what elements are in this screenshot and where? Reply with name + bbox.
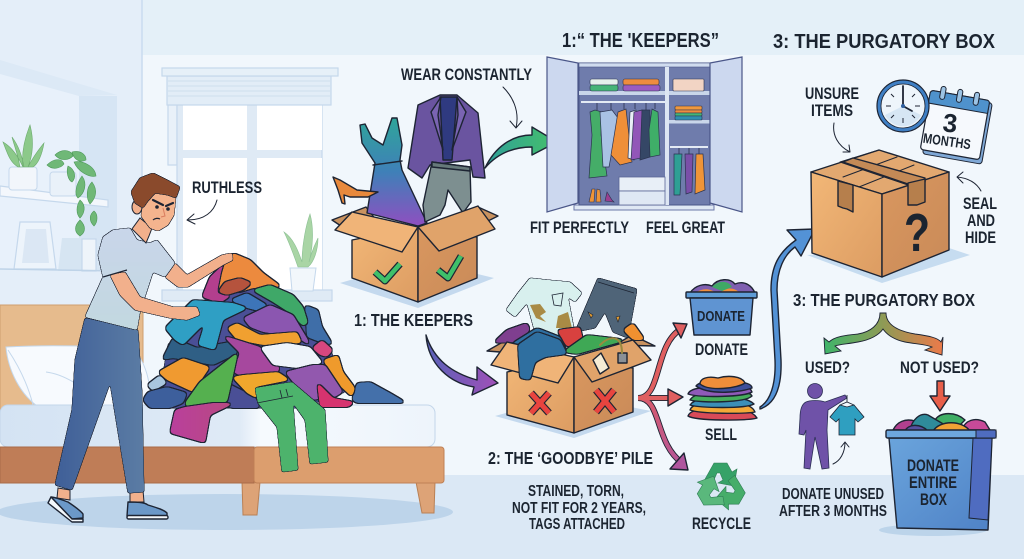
box shadow — [495, 395, 651, 438]
plants on the wall shelf — [3, 125, 97, 236]
bin label: DONATE — [697, 309, 745, 325]
label: seal and hide — [963, 195, 997, 247]
purgatory box — [807, 150, 970, 283]
top face — [811, 150, 949, 194]
fork arrow: used or not used — [824, 313, 943, 355]
goodbye box — [487, 278, 655, 438]
text: donate unused after 3 months: AFTER 3 MONTHS — [779, 503, 887, 520]
green arrow to wardrobe — [485, 127, 557, 168]
label: feel great: FEEL GREAT — [646, 219, 725, 237]
box flaps — [491, 342, 574, 383]
text: goodbye criteria: TAGS ATTACHED — [529, 516, 625, 533]
label: recycle: RECYCLE — [692, 515, 751, 533]
red arrow into bin — [930, 381, 950, 411]
torn jeans — [575, 278, 637, 338]
bin label: ENTIRE — [909, 474, 957, 492]
clothes on top of bin — [893, 414, 990, 431]
label: goodbye pile: 2: THE ‘GOODBYE’ PILE — [488, 448, 653, 468]
hanging garments — [589, 109, 705, 195]
left face — [811, 172, 882, 277]
arrow: ruthless to person — [187, 200, 217, 224]
label: seal and hide: HIDE — [965, 229, 996, 247]
label: seal and hide: AND — [967, 212, 995, 230]
back flaps — [332, 207, 380, 232]
check marks — [375, 256, 461, 281]
folded clothes — [590, 79, 704, 120]
text: donate unused after 3 months: DONATE UNUSED — [782, 486, 884, 503]
blazer — [408, 95, 485, 178]
label: seal and hide: SEAL — [963, 195, 997, 213]
shelves and rails — [579, 67, 710, 205]
label: not used: NOT USED? — [900, 359, 979, 377]
box shadow — [807, 248, 970, 283]
bedroom scene — [0, 0, 453, 530]
shoes — [48, 497, 168, 522]
bed — [0, 305, 453, 530]
bin label — [907, 457, 959, 509]
text: goodbye criteria: STAINED, TORN, — [528, 483, 624, 500]
high heel — [333, 177, 378, 204]
trousers — [423, 162, 471, 222]
back flaps — [487, 335, 530, 352]
lower arm — [110, 272, 200, 320]
wall niche with shelves — [0, 0, 142, 305]
sleeve hem — [103, 270, 127, 277]
box flaps — [335, 212, 418, 252]
shoes in wardrobe — [589, 189, 614, 202]
wardrobe — [547, 57, 742, 212]
dress — [360, 118, 427, 226]
heading: purgatory box: 3: THE PURGATORY BOX — [773, 30, 995, 53]
arrow: person to shirt — [833, 442, 849, 464]
stained shirt — [506, 278, 582, 340]
clock — [877, 80, 929, 132]
box shadow — [340, 260, 494, 308]
face and hair — [131, 173, 180, 231]
red branching arrows — [638, 323, 688, 470]
bin label: BOX — [920, 491, 947, 509]
blue arrow to purgatory box — [760, 229, 815, 409]
heading: keepers: 1:“ THE 'KEEPERS” — [562, 29, 719, 52]
label: ruthless: RUTHLESS — [192, 179, 262, 197]
label: 1: the keepers: 1: THE KEEPERS — [354, 310, 473, 330]
clothes spilling from the box — [493, 323, 645, 380]
recycle symbol — [692, 463, 750, 514]
label: the purgatory box: 3: THE PURGATORY BOX — [793, 290, 975, 310]
label: wear constantly: WEAR CONSTANTLY — [401, 66, 532, 84]
label: unsure items: UNSURE — [805, 85, 859, 103]
hangers — [597, 103, 699, 154]
arrow: seal and hide to box — [957, 172, 981, 191]
plant on window sill — [284, 214, 318, 291]
re-draw hanging blue top over flap — [518, 332, 567, 380]
red crosses — [531, 390, 614, 413]
ankles — [57, 488, 144, 502]
drawers — [619, 177, 665, 205]
keepers box with clothes — [332, 95, 498, 308]
text: goodbye criteria: NOT FIT FOR 2 YEARS, — [512, 500, 646, 517]
pile of clothes — [143, 253, 407, 472]
bin label: DONATE — [907, 457, 959, 475]
jeans — [55, 318, 144, 493]
purple arrow to goodbye box — [426, 335, 498, 395]
neck — [132, 218, 152, 243]
right face — [882, 172, 949, 277]
calendar: 3 months — [920, 84, 994, 164]
wardrobe doors — [547, 57, 578, 212]
box body — [352, 227, 418, 302]
label: unsure items — [805, 85, 859, 120]
label: fit perfectly: FIT PERFECTLY — [530, 219, 629, 237]
donate bin — [686, 280, 757, 335]
label: used: USED? — [805, 359, 850, 377]
arrow: wear constantly to wardrobe — [503, 87, 522, 128]
wardrobe interior — [579, 63, 710, 205]
box body — [507, 357, 574, 433]
label: unsure items: ITEMS — [811, 102, 853, 120]
stack of clothes to sell — [688, 376, 757, 420]
packing tape — [838, 158, 925, 212]
arrow: unsure items to box — [834, 123, 850, 152]
raised arm — [165, 253, 233, 287]
calendar: 3 months: 3 — [941, 107, 959, 139]
person sorting clothes — [48, 173, 233, 522]
t-shirt — [85, 228, 175, 330]
window with blind — [162, 68, 338, 301]
question mark: ? — [904, 203, 930, 263]
label: sell: SELL — [705, 426, 737, 444]
text: donate unused after 3 months — [779, 486, 887, 520]
calendar: 3 months: MONTHS — [922, 130, 972, 152]
label: donate: DONATE — [695, 341, 748, 359]
icon: person holding shirt — [799, 384, 864, 469]
tag and lock — [593, 338, 627, 374]
text: goodbye criteria — [512, 483, 646, 533]
donate entire box bin — [879, 414, 996, 536]
